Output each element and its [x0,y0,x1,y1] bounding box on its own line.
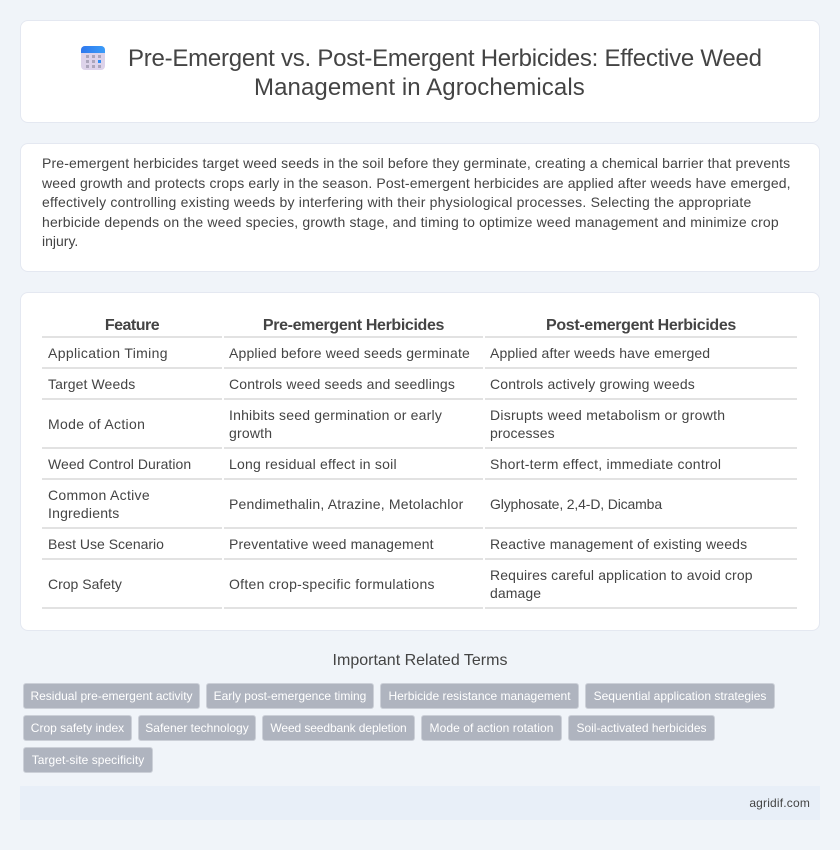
column: post-emergent: Disrupts weed metabolism or growth [490,407,725,423]
intro paragraph: effectively controlling existing weeds by interfering with their physiological processes. Selecting the appropriate [42,194,751,210]
column: pre-emergent [229,345,470,592]
footer bar [20,786,820,820]
column: pre-emergent: Long residual effect in soil [229,456,397,472]
related terms tags: Soil-activated herbicides [576,721,707,735]
column: feature: Ingredients [48,505,119,521]
column: feature: Common Active [48,487,150,503]
related terms tags: Crop safety index [31,721,124,735]
column: post-emergent: Requires careful application to avoid crop [490,567,753,583]
column: post-emergent: Reactive management of existing weeds [490,536,747,552]
table header: Pre-emergent Herbicides [263,317,444,334]
column: post-emergent [490,345,753,601]
title: Management in Agrochemicals [254,74,585,101]
related terms tags: Sequential application strategies [594,689,766,703]
comparison table panel [20,292,820,631]
related terms tags: Herbicide resistance management [388,689,571,703]
column: pre-emergent: Applied before weed seeds germinate [229,345,470,361]
table header: Feature [105,317,159,334]
related terms tags: Early post-emergence timing [214,689,366,703]
related terms tags: Weed seedbank depletion [270,721,407,735]
related terms tags: Target-site specificity [32,753,144,767]
column: feature: Mode of Action [48,416,145,432]
column: post-emergent: Controls actively growing weeds [490,376,695,392]
icon: calendar [81,46,105,70]
related terms tags: Safener technology [145,721,249,735]
column: pre-emergent: Controls weed seeds and seedlings [229,376,455,392]
column: pre-emergent: Often crop-specific formulations [229,576,435,592]
table header: Post-emergent Herbicides [546,317,736,334]
intro paragraph: Pre-emergent herbicides target weed seeds in the soil before they germinate, creating a chemical barrier that prevents [42,155,790,171]
title: Pre-Emergent vs. Post-Emergent Herbicides: Effective Weed [128,45,762,72]
column: pre-emergent: Inhibits seed germination or early [229,407,442,423]
column: pre-emergent: growth [229,425,272,441]
column: post-emergent: damage [490,585,541,601]
title card [20,20,820,123]
intro text panel [20,143,820,272]
title [128,45,762,101]
column: post-emergent: Glyphosate, 2,4-D, Dicamba [490,496,662,512]
column: post-emergent: processes [490,425,555,441]
intro paragraph: weed growth and protects crops early in the season. Post-emergent herbicides are applied after weeds have emerged, [42,175,791,191]
column: feature: Target Weeds [48,376,135,392]
column: feature: Best Use Scenario [48,536,164,552]
column: feature: Crop Safety [48,576,122,592]
column: pre-emergent: Pendimethalin, Atrazine, Metolachlor [229,496,463,512]
related terms tags: Residual pre-emergent activity [30,689,193,703]
intro paragraph: injury. [42,233,78,249]
column: post-emergent: Applied after weeds have emerged [490,345,710,361]
intro paragraph [42,155,791,249]
related terms heading: Important Related Terms [333,652,507,669]
column: feature: Weed Control Duration [48,456,191,472]
table header [105,317,736,334]
footer source: agridif.com [749,796,810,810]
column: feature [48,345,191,592]
related terms tags: Mode of action rotation [430,721,553,735]
intro paragraph: herbicide depends on the weed species, growth stage, and timing to optimize weed management and minimize crop [42,214,779,230]
related terms tags [23,683,775,773]
column: feature: Application Timing [48,345,168,361]
column: post-emergent: Short-term effect, immediate control [490,456,721,472]
column: pre-emergent: Preventative weed management [229,536,434,552]
